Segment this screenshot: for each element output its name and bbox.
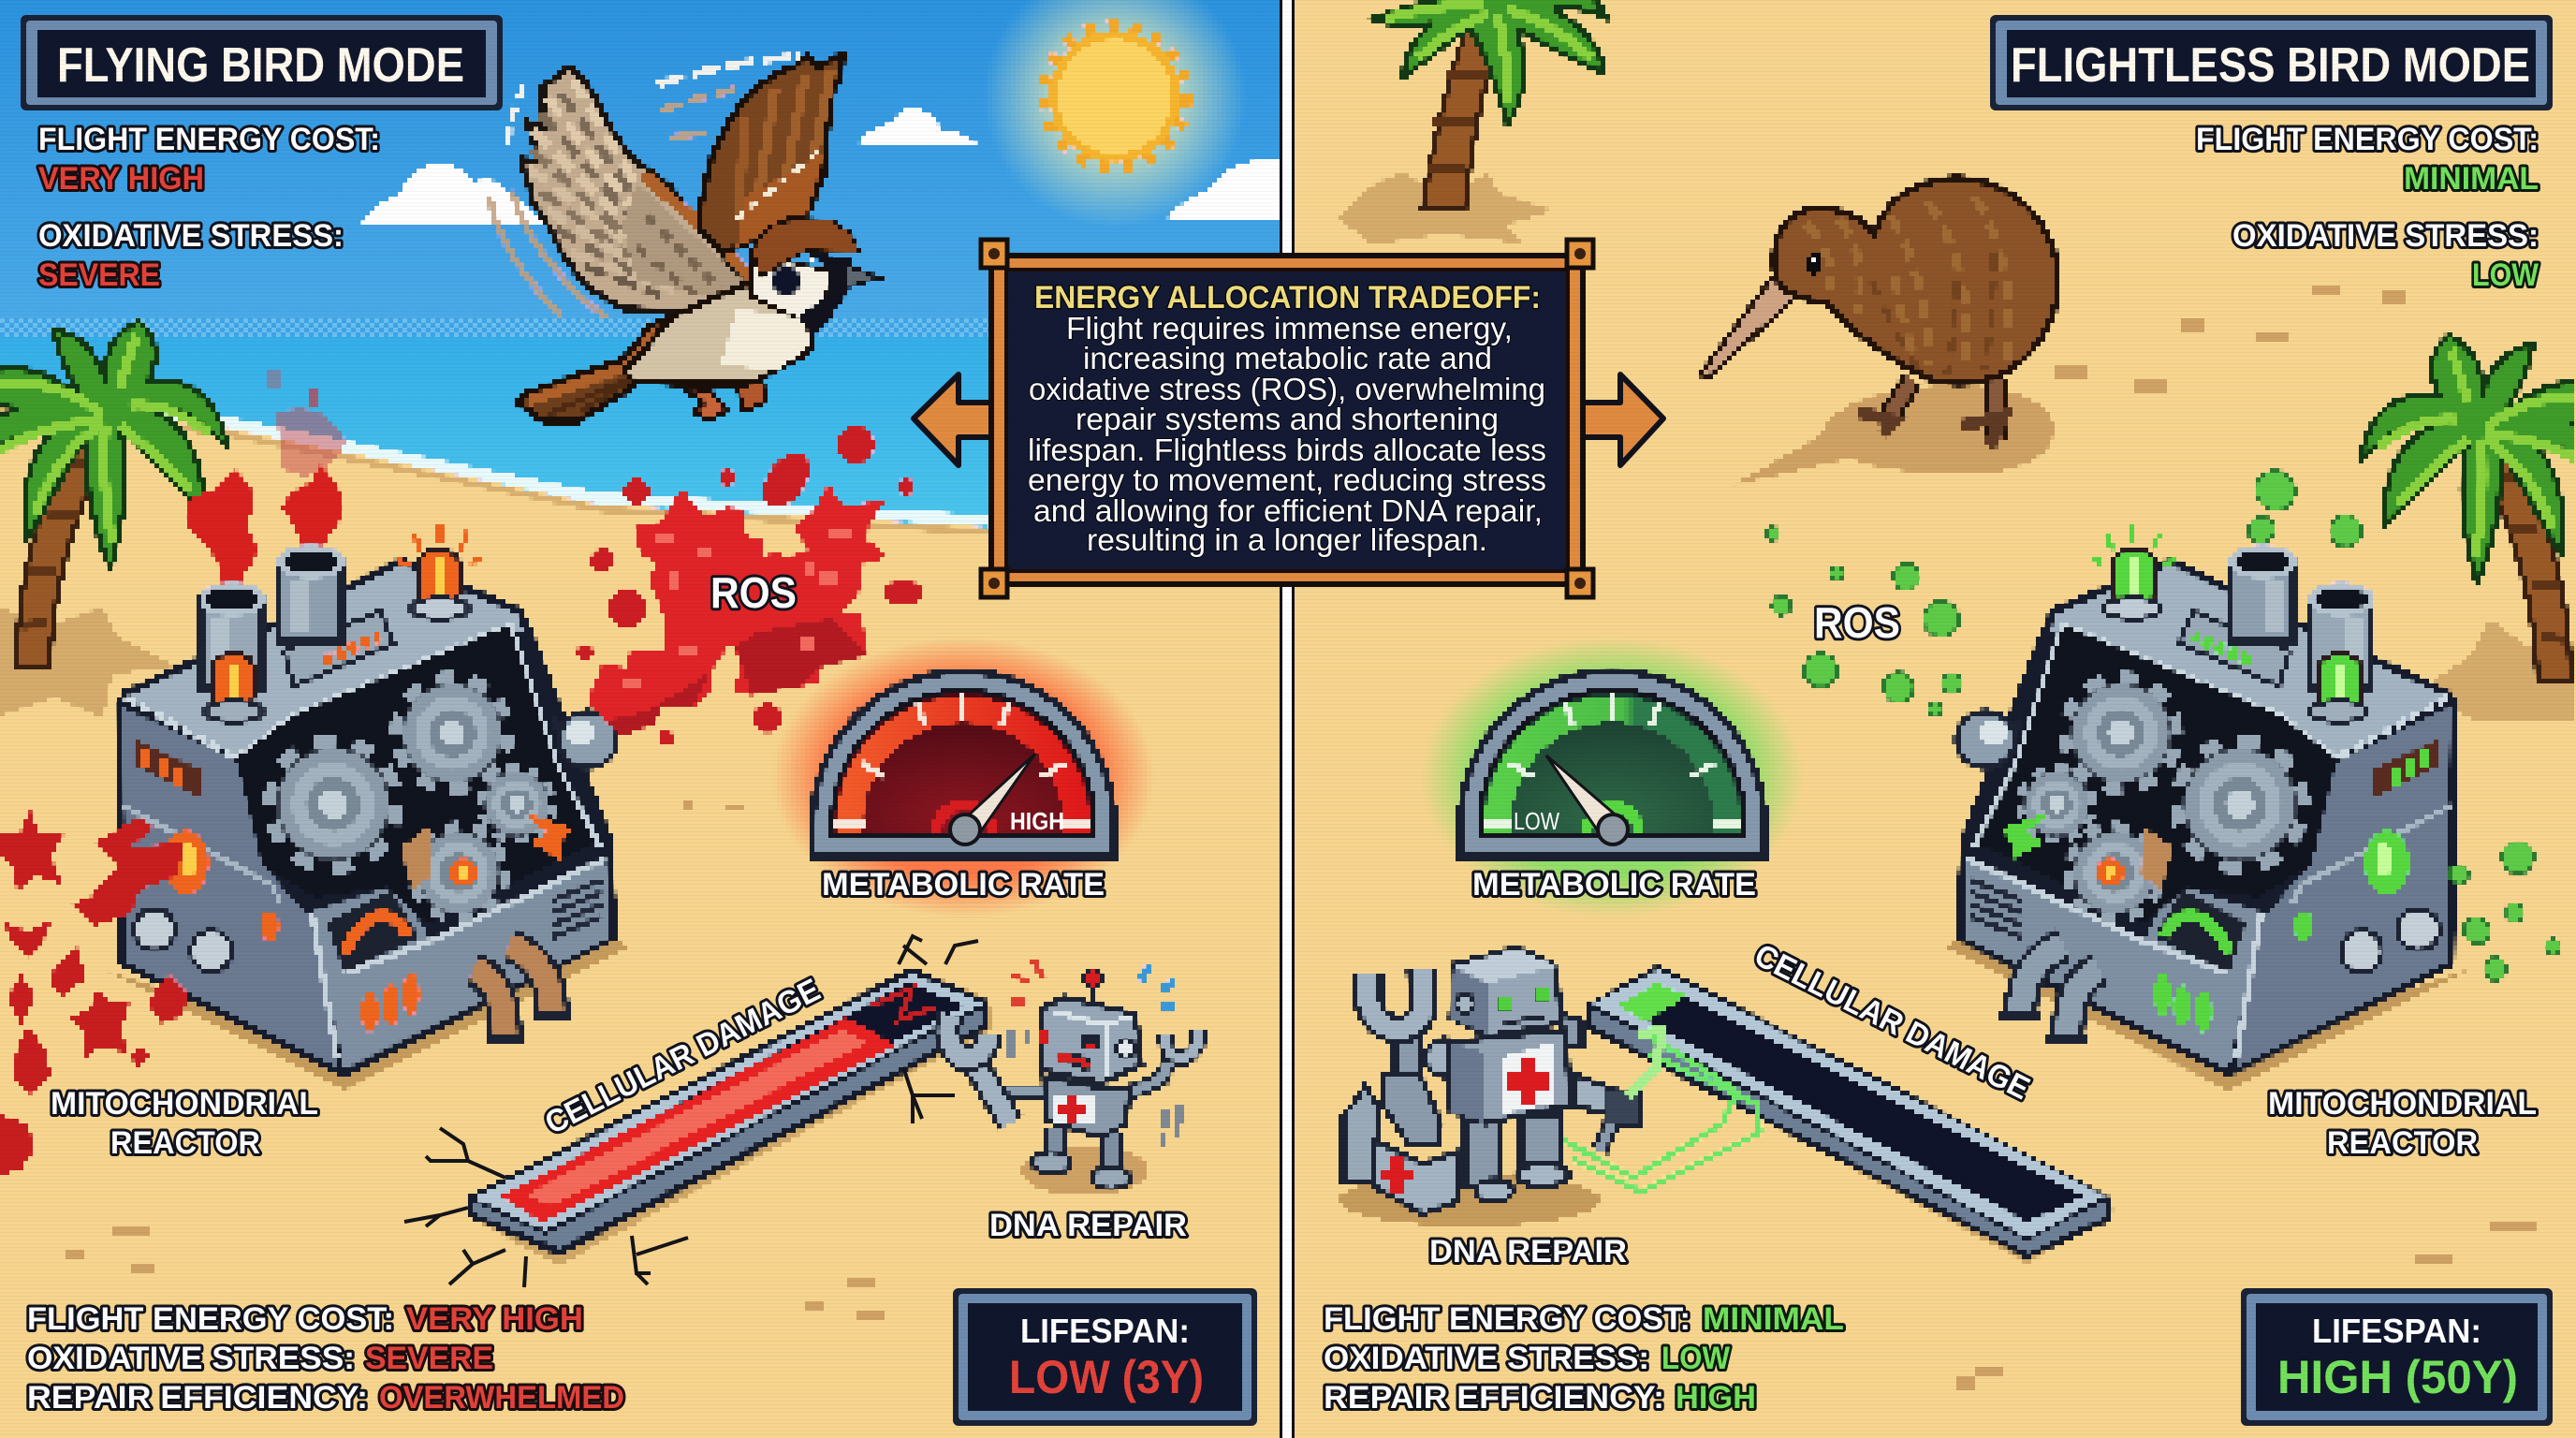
summary: flightless bottom: REPAIR EFFICIENCY:	[1324, 1380, 1664, 1416]
metabolic gauge, flying	[771, 637, 1155, 917]
red debris from reactor	[0, 810, 187, 1175]
sea	[0, 335, 1282, 580]
center divider	[1280, 0, 1295, 1438]
lifespan box, flying: LOW (3Y)	[1009, 1351, 1204, 1403]
repair robot, overwhelmed	[947, 960, 1198, 1196]
ROS splatter, flying	[577, 426, 922, 745]
lifespan box, flightless: LIFESPAN:	[2312, 1312, 2481, 1350]
sun	[984, 0, 1246, 227]
stats: flightless top: LOW	[2472, 257, 2539, 293]
gauge needle and label, flying: HIGH	[1010, 807, 1064, 835]
info body text: oxidative stress (ROS), overwhelming	[1029, 372, 1545, 406]
stats: flightless top: MINIMAL	[2404, 161, 2539, 197]
gauge needle and label, flightless	[1514, 756, 1628, 844]
sparrow: flying bird	[490, 54, 880, 421]
stats: flying top	[38, 122, 380, 293]
label: mitochondrial reactor, flying	[51, 1086, 318, 1161]
kiwi: flightless bird	[1700, 178, 2057, 486]
info body text	[1028, 311, 1546, 557]
title: flying bird mode: FLYING BIRD MODE	[57, 38, 464, 93]
summary: flightless bottom: MINIMAL	[1703, 1301, 1844, 1337]
palm tree, right	[2360, 335, 2576, 719]
stats: flightless top: OXIDATIVE STRESS:	[2232, 218, 2539, 254]
label: dna repair, flightless: DNA REPAIR	[1429, 1234, 1627, 1269]
ROS label, flying: ROS	[710, 568, 797, 617]
summary: flying bottom: SEVERE	[365, 1341, 493, 1376]
label: cellular damage, flightless: CELLULAR DAMAGE	[1749, 937, 2035, 1107]
label: dna repair, flying: DNA REPAIR	[989, 1208, 1187, 1243]
summary: flightless bottom: LOW	[1661, 1341, 1731, 1376]
info body text: resulting in a longer lifespan.	[1087, 522, 1487, 557]
stats: flying top: FLIGHT ENERGY COST:	[38, 122, 380, 157]
info body text: repair systems and shortening	[1076, 402, 1499, 436]
metabolic gauge, flightless	[1420, 637, 1804, 917]
label: mitochondrial reactor, flying: REACTOR	[110, 1125, 260, 1161]
palm tree, left	[0, 321, 227, 719]
info body text: energy to movement, reducing stress	[1028, 462, 1546, 497]
cellular damage bar, flying	[468, 967, 992, 1266]
ROS label, flightless: ROS	[1814, 598, 1900, 647]
arrow: right	[1582, 374, 1663, 465]
summary: flying bottom	[27, 1301, 624, 1416]
info heading: ENERGY ALLOCATION TRADEOFF:	[1034, 280, 1541, 315]
lifespan box, flying: LIFESPAN:	[1020, 1312, 1190, 1350]
stats: flightless top: FLIGHT ENERGY COST:	[2196, 122, 2539, 157]
smoke from reactor, left	[185, 370, 345, 609]
arrow: left	[914, 374, 992, 465]
gauge needle and label, flightless: LOW	[1514, 807, 1559, 835]
clouds	[361, 109, 1282, 225]
stats: flightless top	[2196, 122, 2539, 293]
repair robot, calm	[1339, 947, 1760, 1226]
title: flying bird mode	[21, 15, 503, 110]
info body text: increasing metabolic rate and	[1083, 341, 1492, 375]
summary: flying bottom: REPAIR EFFICIENCY:	[27, 1380, 368, 1416]
stats: flying top: SEVERE	[38, 257, 160, 293]
label: mitochondrial reactor, flightless: MITOCHONDRIAL	[2268, 1086, 2537, 1122]
info panel: energy allocation tradeoff	[981, 240, 1593, 597]
label: metabolic rate, flying: METABOLIC RATE	[822, 867, 1105, 902]
surf foam	[0, 399, 1282, 573]
gauge needle and label, flying	[950, 754, 1064, 844]
summary: flightless bottom: OXIDATIVE STRESS:	[1324, 1341, 1649, 1376]
mitochondrial reactor, flightless	[1946, 524, 2470, 1091]
stats: flying top: OXIDATIVE STRESS:	[38, 218, 344, 254]
lifespan box, flying	[953, 1288, 1257, 1426]
lifespan box, flightless	[2241, 1288, 2553, 1426]
info body text: and allowing for efficient DNA repair,	[1033, 493, 1543, 528]
title: flightless bird mode	[1990, 15, 2553, 110]
cellular damage bar, flightless	[1588, 964, 2117, 1264]
info body text: Flight requires immense energy,	[1066, 311, 1513, 345]
palm tree, top	[1338, 0, 1608, 245]
label: mitochondrial reactor, flightless: REACTOR	[2327, 1125, 2478, 1161]
lifespan box, flightless: HIGH (50Y)	[2277, 1351, 2518, 1403]
label: cellular damage, flying: CELLULAR DAMAGE	[539, 972, 826, 1141]
label: mitochondrial reactor, flightless	[2268, 1086, 2537, 1161]
sky	[0, 0, 1282, 323]
summary: flying bottom: FLIGHT ENERGY COST:	[27, 1301, 394, 1337]
summary: flying bottom: OVERWHELMED	[379, 1380, 624, 1416]
info body text: lifespan. Flightless birds allocate less	[1028, 433, 1546, 467]
cracks around damage bar	[404, 936, 978, 1287]
summary: flightless bottom: HIGH	[1676, 1380, 1756, 1416]
green ROS particles, flightless	[1766, 471, 2560, 980]
summary: flying bottom: VERY HIGH	[406, 1301, 583, 1337]
summary: flightless bottom	[1324, 1301, 1844, 1416]
summary: flightless bottom: FLIGHT ENERGY COST:	[1324, 1301, 1690, 1337]
label: mitochondrial reactor, flying: MITOCHONDRIAL	[51, 1086, 318, 1122]
label: metabolic rate, flightless: METABOLIC RATE	[1472, 867, 1756, 902]
summary: flying bottom: OXIDATIVE STRESS:	[27, 1341, 355, 1376]
mitochondrial reactor, flying	[103, 524, 627, 1091]
stats: flying top: VERY HIGH	[38, 161, 204, 197]
footprints in sand	[66, 285, 2537, 1389]
